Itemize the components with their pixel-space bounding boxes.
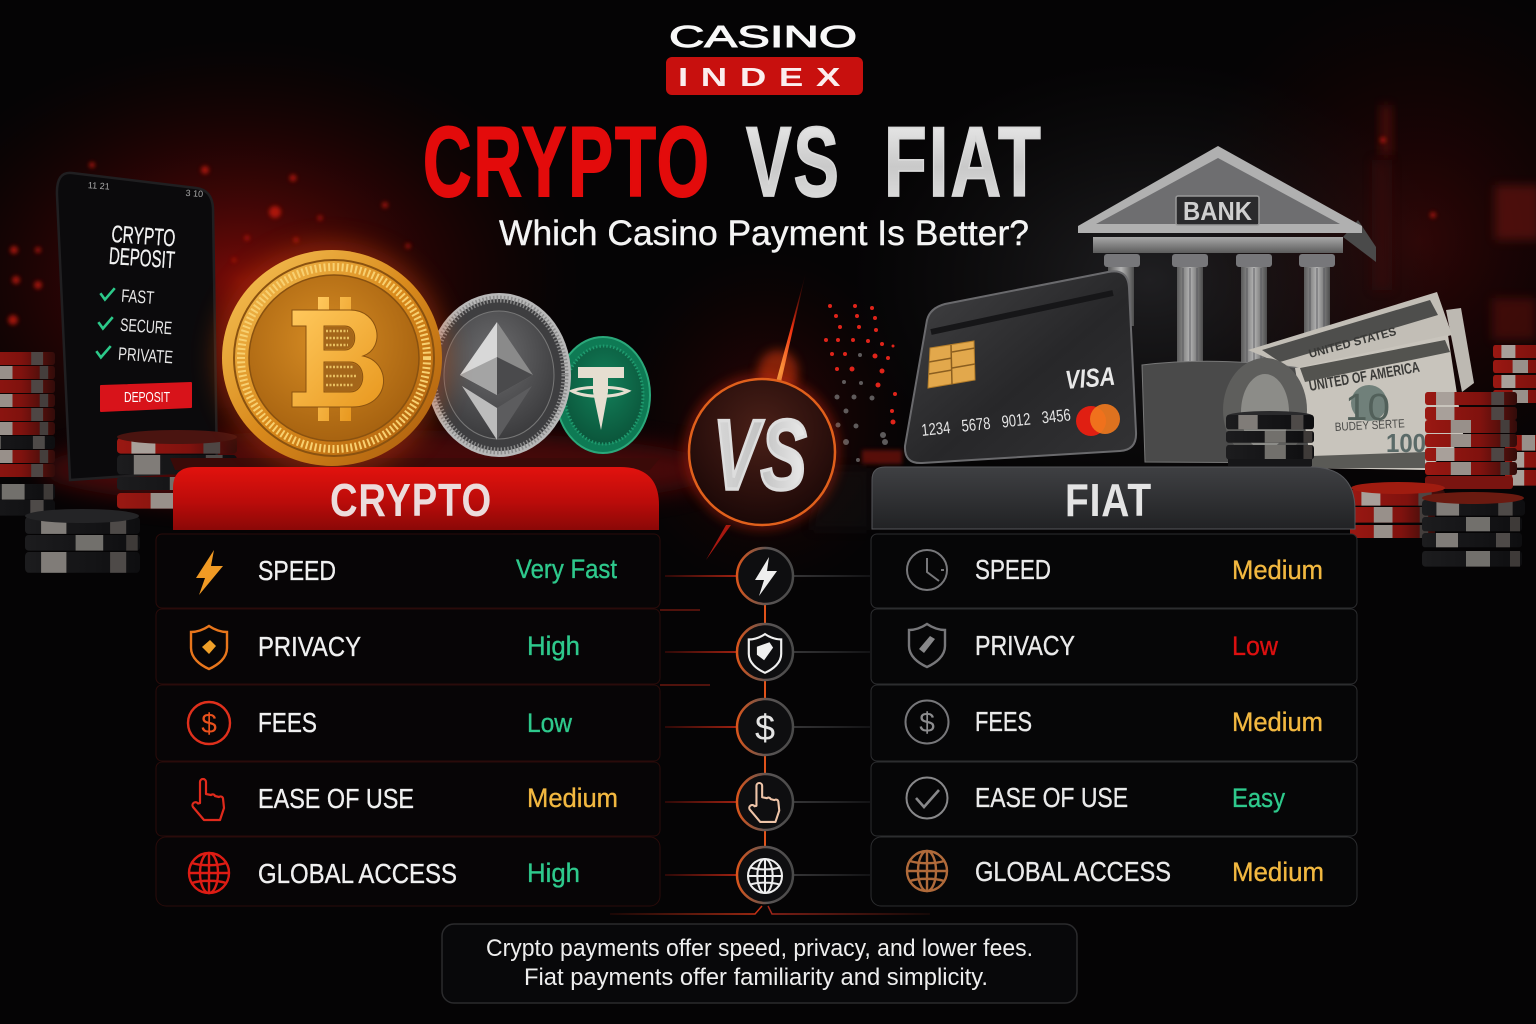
crypto row: speed: Very Fast	[516, 554, 617, 584]
fiat row: fees	[871, 685, 1357, 761]
front-left chip stacks	[25, 430, 237, 573]
fiat row: global access: Medium	[1232, 857, 1324, 887]
center icon: privacy	[737, 624, 793, 680]
coin: ethereum	[427, 293, 571, 457]
crypto row: privacy: High	[527, 631, 580, 661]
center connector	[610, 576, 930, 914]
crypto row: ease of use: EASE OF USE	[258, 783, 414, 814]
icon: shield	[909, 624, 945, 667]
callout: summary: Fiat payments offer familiarity and simplicity.	[524, 964, 988, 991]
panel: crypto	[156, 467, 660, 906]
icon: globe	[189, 853, 229, 893]
bank sign: BANK	[1183, 196, 1252, 226]
fiat row: ease of use	[871, 762, 1357, 836]
coin: bitcoin	[215, 241, 449, 475]
title: CRYPTO	[423, 106, 711, 217]
coin: tether	[556, 337, 650, 453]
icon: shield	[191, 626, 227, 669]
icon: dollar	[906, 700, 948, 744]
crypto row: ease of use	[156, 762, 660, 836]
panel: fiat	[871, 467, 1357, 906]
subtitle: Which Casino Payment Is Better?	[499, 214, 1029, 253]
icon: clock	[907, 550, 947, 590]
crypto row: fees	[156, 685, 660, 761]
callout: summary: Crypto payments offer speed, privacy, and lower fees.	[486, 935, 1033, 962]
right chip stacks	[1226, 345, 1536, 567]
phone checks: FAST	[121, 286, 155, 308]
center icon: global access	[737, 847, 793, 903]
cash bills: BUDEY SERTE	[1334, 416, 1405, 434]
icon: bolt	[196, 550, 223, 595]
bank columns	[1104, 254, 1335, 376]
card chip	[928, 341, 975, 388]
fiat row: privacy: Low	[1232, 631, 1278, 661]
center icon: fees: $	[755, 707, 775, 748]
logo badge: index: INDEX	[678, 62, 853, 92]
phone status: 11 21	[88, 180, 110, 192]
magnetic stripe	[931, 293, 1113, 332]
mastercard mark	[1076, 404, 1120, 436]
cash bills: 100	[1386, 428, 1426, 458]
crypto row: speed: SPEED	[258, 555, 336, 586]
icon: dollar: $	[919, 707, 935, 738]
crypto row: fees: FEES	[258, 707, 317, 738]
bill text: UNITED OF AMERICA	[1308, 359, 1421, 395]
cash bills: 10	[1345, 387, 1390, 429]
phone	[57, 173, 217, 480]
phone deposit button	[101, 383, 191, 411]
crypto row: privacy: PRIVACY	[258, 631, 361, 662]
title	[423, 106, 1043, 217]
title: FIAT	[884, 106, 1043, 217]
fiat row: privacy	[871, 609, 1357, 684]
crypto row: global access	[156, 837, 660, 906]
vs badge: VS	[713, 399, 808, 510]
cash bills: UNITED STATES	[1307, 324, 1398, 361]
crypto row: global access: High	[527, 858, 580, 888]
card number: 1234 5678 9012 3456	[920, 405, 1072, 440]
phone: DEPOSIT	[108, 243, 176, 274]
credit card	[905, 271, 1136, 463]
bank	[1078, 146, 1376, 376]
crypto row: fees: Low	[527, 708, 572, 738]
crypto row: speed	[156, 534, 660, 608]
phone checks: SECURE	[120, 315, 173, 338]
center icon: fees	[737, 699, 793, 755]
crypto header	[173, 467, 659, 530]
crypto row: ease of use: Medium	[527, 783, 618, 813]
icon: dollar	[188, 702, 230, 744]
fiat row: privacy: PRIVACY	[975, 630, 1075, 661]
fiat row: ease of use: Easy	[1232, 783, 1285, 813]
fiat row: speed	[871, 534, 1357, 608]
center icon: speed	[737, 548, 793, 604]
fiat row: global access	[871, 837, 1357, 906]
icon: hand	[192, 779, 224, 820]
phone heading: CRYPTO	[111, 221, 176, 252]
fiat header: FIAT	[1065, 474, 1152, 526]
fiat row: speed: SPEED	[975, 554, 1051, 585]
fiat row: global access: GLOBAL ACCESS	[975, 856, 1171, 887]
callout: summary	[442, 924, 1077, 1003]
icon: check	[906, 778, 948, 818]
fiat row: ease of use: EASE OF USE	[975, 782, 1128, 813]
phone deposit button: DEPOSIT	[124, 389, 170, 406]
icon: globe	[907, 851, 947, 891]
logo wordmark: casino: CASINO	[669, 19, 857, 54]
cash bills	[1142, 292, 1474, 470]
center icon: ease of use	[737, 774, 793, 830]
fiat row: fees: FEES	[975, 706, 1032, 737]
crypto ledge	[170, 458, 660, 470]
left chip stacks	[0, 352, 55, 516]
card logo: VISA	[1064, 361, 1116, 395]
title: VS	[746, 106, 841, 217]
phone: 3 10	[185, 188, 203, 199]
crypto row: privacy	[156, 609, 660, 684]
vs badge	[683, 373, 841, 531]
crypto row: global access: GLOBAL ACCESS	[258, 858, 457, 889]
phone checks: PRIVATE	[118, 344, 174, 367]
phone checks	[96, 284, 178, 367]
crypto header: CRYPTO	[330, 474, 492, 526]
fiat header	[872, 467, 1355, 529]
fiat row: speed: Medium	[1232, 555, 1323, 585]
lightning streaks	[706, 272, 806, 560]
logo badge: index	[666, 57, 863, 95]
logo	[666, 19, 863, 95]
fiat row: fees: Medium	[1232, 707, 1323, 737]
icon: dollar: $	[201, 708, 217, 739]
